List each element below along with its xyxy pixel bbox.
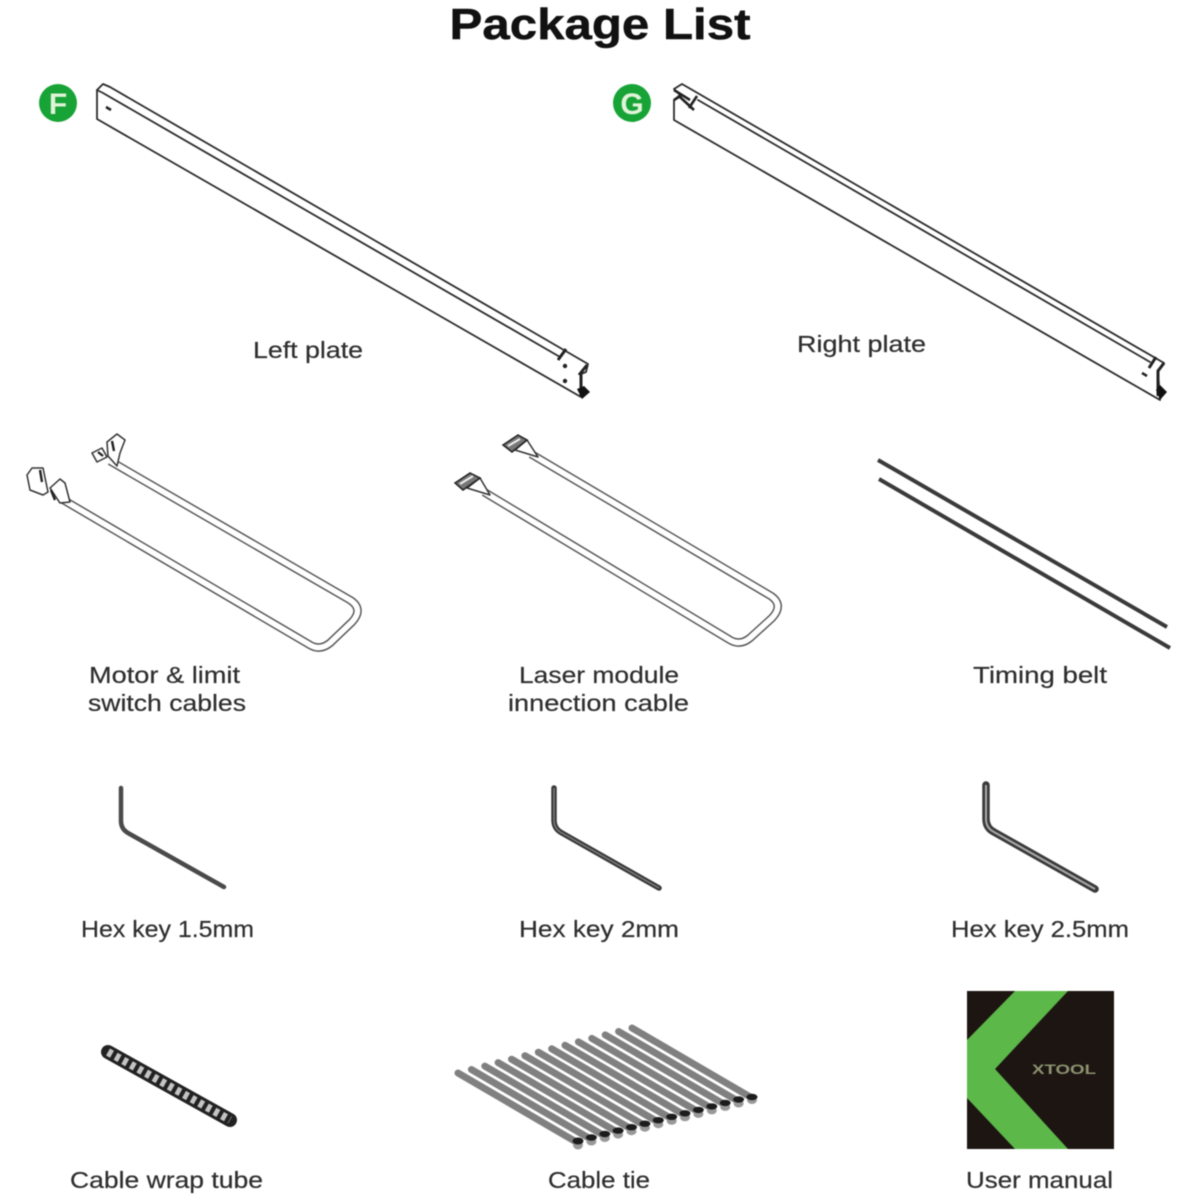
icon: motor and limit switch cables [27, 434, 358, 648]
icon: user manual cover: XTOOL [1032, 1061, 1097, 1077]
panel: left plate [39, 84, 590, 399]
panel: right plate [613, 84, 1167, 400]
panel: hex key 2.5mm [951, 785, 1129, 942]
label: hex key 2mm: Hex key 2mm [519, 916, 679, 942]
icon: cable wrap tube [108, 1052, 230, 1120]
label: laser module connection cable: Laser module [519, 662, 679, 688]
icon: right plate [674, 84, 1167, 400]
icon: user manual cover [967, 991, 1114, 1149]
panel: user manual [966, 991, 1114, 1193]
panel: motor and limit switch cables [27, 434, 358, 716]
panel: hex key 2mm [519, 788, 679, 942]
title: Package List [450, 0, 751, 49]
label: hex key 1.5mm: Hex key 1.5mm [81, 916, 254, 942]
label: motor and limit switch cables: Motor & limit [89, 662, 241, 688]
label: hex key 2.5mm: Hex key 2.5mm [951, 916, 1129, 942]
badge F: F [49, 88, 67, 121]
panel: hex key 1.5mm [81, 788, 254, 942]
label: motor and limit switch cables [88, 662, 246, 716]
label: user manual: User manual [966, 1167, 1113, 1193]
label: motor and limit switch cables: switch cables [88, 690, 246, 716]
label: cable wrap tube: Cable wrap tube [70, 1167, 263, 1193]
badge F [39, 84, 77, 122]
label: right plate: Right plate [797, 331, 926, 357]
badge G [613, 84, 651, 122]
icon: timing belt [878, 460, 1170, 648]
panel: timing belt [878, 460, 1170, 688]
label: timing belt: Timing belt [973, 662, 1108, 688]
icon: cable ties [458, 1028, 758, 1150]
icon: hex key 2.5mm [986, 785, 1095, 889]
label: laser module connection cable [508, 662, 689, 716]
icon: hex key 2mm [554, 788, 659, 888]
panel: cable tie [458, 1028, 758, 1193]
icon: left plate [97, 84, 590, 399]
label: cable tie: Cable tie [548, 1167, 650, 1193]
label: laser module connection cable: innection cable [508, 690, 689, 716]
panel: cable wrap tube [70, 1052, 263, 1193]
badge G: G [620, 88, 644, 121]
label: left plate: Left plate [253, 337, 363, 363]
icon: laser module connection cable [455, 435, 778, 643]
panel: laser module connection cable [455, 435, 778, 716]
icon: hex key 1.5mm [121, 788, 224, 887]
